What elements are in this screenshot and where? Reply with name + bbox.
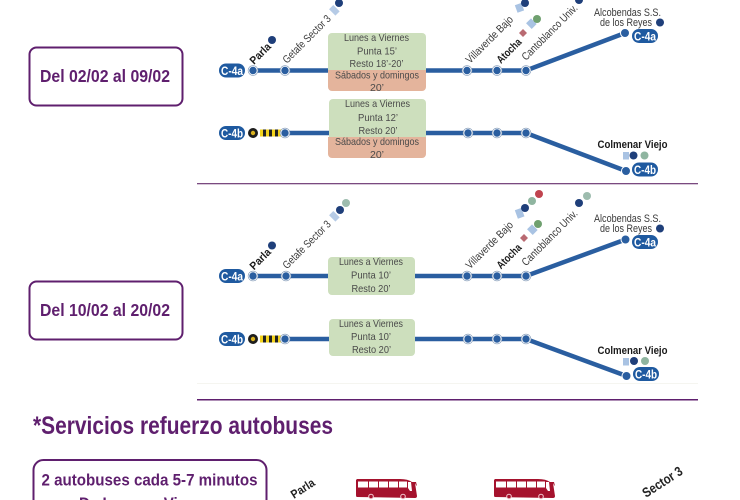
badge: C-4b: C-4b [221, 334, 243, 346]
frequency box: C-4a period 2 [328, 256, 415, 295]
station labels [248, 190, 664, 273]
frequency box: C-4a period 2: Resto 20’ [352, 283, 390, 295]
date box: Del 10/02 al 20/02 [30, 282, 182, 340]
station labels: Parla [248, 246, 274, 273]
frequency box: C-4a period 1: Sábados y domingos [335, 70, 419, 82]
station label: Colmenar Viejo [598, 345, 668, 366]
station labels: de los Reyes [600, 223, 652, 235]
frequency box: C-4b period 1: Lunes a Viernes [345, 98, 410, 110]
info box: bus frequency: 2 autobuses cada 5-7 minutos [42, 472, 258, 490]
badge: C-4a: C-4a [221, 66, 244, 78]
frequency box: C-4a period 2: Punta 10’ [351, 270, 391, 282]
frequency box: C-4b period 2: Punta 10’ [351, 331, 391, 343]
station labels: Cantoblanco Univ. [520, 208, 580, 269]
station labels: Getafe Sector 3 [281, 219, 334, 272]
badge: C-4a: C-4a [221, 271, 244, 283]
badge: C-4a end: C-4a [634, 237, 657, 249]
frequency box: C-4a period 1 [328, 32, 426, 94]
frequency box: C-4b period 1: 20’ [370, 149, 384, 161]
icon: bus 1 [356, 479, 417, 499]
frequency box: C-4a period 1: Punta 15’ [357, 46, 397, 58]
station labels: Villaverde Bajo [464, 14, 516, 66]
station labels: Parla [248, 40, 274, 67]
frequency box: C-4a period 1: 20’ [370, 82, 384, 94]
date box: Del 02/02 al 09/02: Del 02/02 al 09/02 [40, 66, 170, 86]
route diagram: period 2 line C-4a [219, 190, 664, 283]
icon: tunnel section [248, 334, 281, 344]
label: Sector 3: Sector 3 [639, 463, 686, 500]
route diagram: period 1 line C-4a [219, 0, 664, 78]
frequency box: C-4a period 2: Lunes a Viernes [339, 256, 403, 268]
badge: C-4b end: C-4b [634, 165, 656, 177]
station labels [248, 0, 664, 67]
icon: bus 2 [494, 479, 555, 499]
station labels: Atocha [495, 36, 525, 66]
station labels: Getafe Sector 3 [281, 13, 334, 66]
route diagram: period 2 line C-4b [219, 332, 668, 381]
station label: Colmenar Viejo: Colmenar Viejo [598, 345, 668, 357]
heading: Servicios refuerzo autobuses: *Servicios refuerzo autobuses [33, 412, 333, 440]
station label: Colmenar Viejo [598, 139, 668, 160]
frequency box: C-4b period 1: Resto 20’ [358, 125, 398, 137]
station labels: Villaverde Bajo [464, 219, 516, 272]
icon: tunnel section [248, 128, 281, 138]
frequency box: C-4b period 2: Lunes a Viernes [339, 318, 403, 330]
date box: Del 10/02 al 20/02: Del 10/02 al 20/02 [40, 300, 170, 320]
station labels: de los Reyes [600, 17, 652, 29]
route diagram: period 1 line C-4b [219, 126, 668, 177]
frequency box: C-4b period 1: Punta 12’ [358, 112, 398, 124]
badge: C-4a end: C-4a [634, 31, 657, 43]
frequency box: C-4b period 1 [328, 98, 426, 161]
frequency box: C-4a period 1: Resto 18’-20’ [350, 58, 404, 70]
station labels: Atocha [495, 241, 525, 272]
frequency box: C-4a period 1: Lunes a Viernes [344, 32, 409, 44]
frequency box: C-4b period 2 [329, 318, 415, 356]
station labels: Alcobendas S.S. [594, 213, 661, 225]
station label: Colmenar Viejo: Colmenar Viejo [598, 139, 668, 151]
station labels: Alcobendas S.S. [594, 7, 661, 19]
badge: C-4b: C-4b [221, 128, 243, 140]
frequency box: C-4b period 2: Resto 20’ [352, 344, 391, 356]
frequency box: C-4b period 1: Sábados y domingos [335, 136, 419, 148]
info box: bus frequency [34, 460, 266, 500]
date box: Del 02/02 al 09/02 [30, 48, 182, 106]
badge: C-4b end: C-4b [635, 369, 657, 381]
